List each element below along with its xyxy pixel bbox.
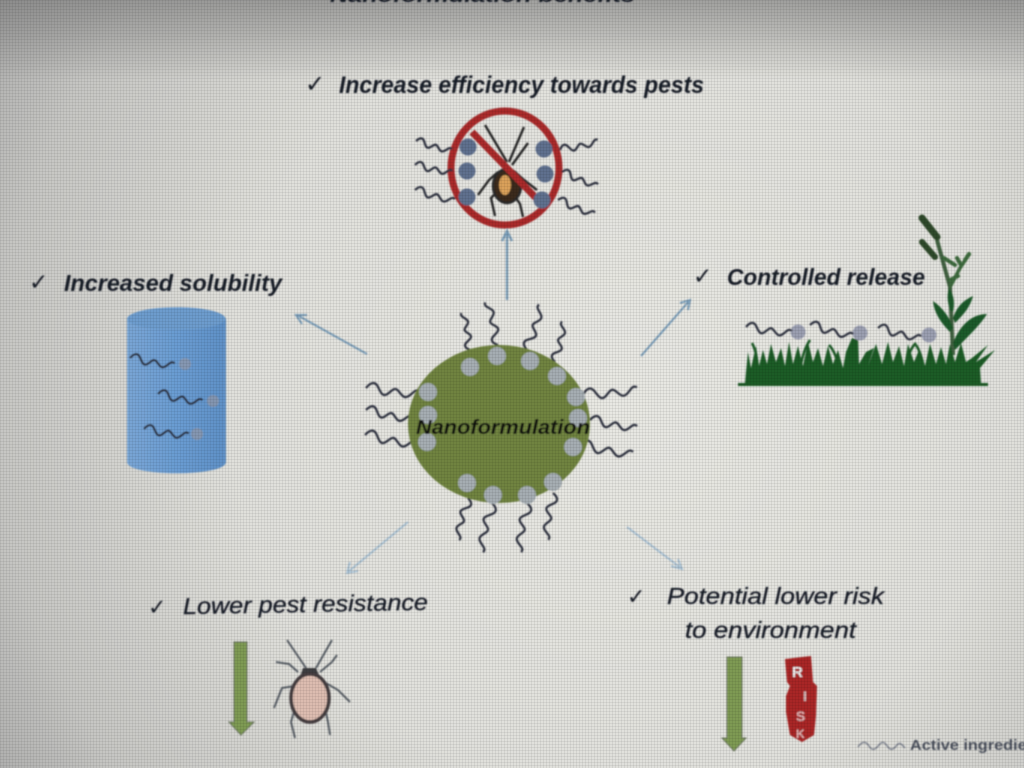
- heading: increase efficiency towards pests: ✓: [305, 70, 325, 98]
- heading: lower pest resistance: ✓: [148, 595, 167, 621]
- chains: [364, 301, 638, 553]
- arrow: upper right: [641, 300, 690, 356]
- heading: lower pest resistance: Lower pest resistance: [183, 589, 428, 619]
- label: Nanoformulation: [416, 417, 590, 439]
- icon: red risk blocks: I: [803, 688, 807, 704]
- icon: grass and plant with released active ingredient: [738, 218, 995, 386]
- heading: increased solubility: Increased solubility: [64, 270, 283, 296]
- icon: water cylinder: [127, 307, 226, 473]
- released dots: [790, 324, 936, 342]
- icon: red risk blocks: R: [792, 664, 803, 681]
- icon: aphid: [274, 640, 350, 738]
- pest: [478, 125, 537, 217]
- plant: [922, 218, 987, 355]
- icon: red risk blocks: [785, 656, 817, 742]
- heading: increase efficiency towards pests: Increase efficiency towards pests: [339, 72, 704, 99]
- heading: potential lower risk to environment: to environment: [685, 617, 858, 643]
- red prohibition ring: [451, 111, 559, 225]
- arrow: lower left: [347, 522, 408, 573]
- heading: controlled release: Controlled release: [727, 264, 925, 290]
- arrow: up: [502, 231, 512, 300]
- nanoformulation particle: [364, 301, 638, 553]
- icon: red risk blocks: S: [796, 708, 805, 724]
- chains: [414, 137, 599, 217]
- heading: potential lower risk to environment: [627, 583, 886, 643]
- grass: [738, 338, 995, 386]
- arrow: lower right: [627, 527, 682, 569]
- legend: active ingredient: [858, 737, 1024, 754]
- dots: [418, 347, 587, 504]
- heading: increased solubility: ✓: [29, 270, 48, 296]
- heading: potential lower risk to environment: ✓: [627, 585, 645, 610]
- arrow: green down, pest resistance: [229, 642, 254, 735]
- arrow: upper left: [296, 315, 367, 354]
- icon: red risk blocks: K: [796, 727, 805, 741]
- heading: controlled release: ✓: [693, 264, 712, 290]
- icon: crossed-out pest with active ingredient chains: [414, 111, 599, 225]
- active ingredient dots: [458, 138, 554, 208]
- chains: [745, 321, 922, 342]
- heading: potential lower risk to environment: Potential lower risk: [667, 583, 886, 609]
- green core: [408, 345, 590, 503]
- arrow: green down, risk: [722, 657, 746, 751]
